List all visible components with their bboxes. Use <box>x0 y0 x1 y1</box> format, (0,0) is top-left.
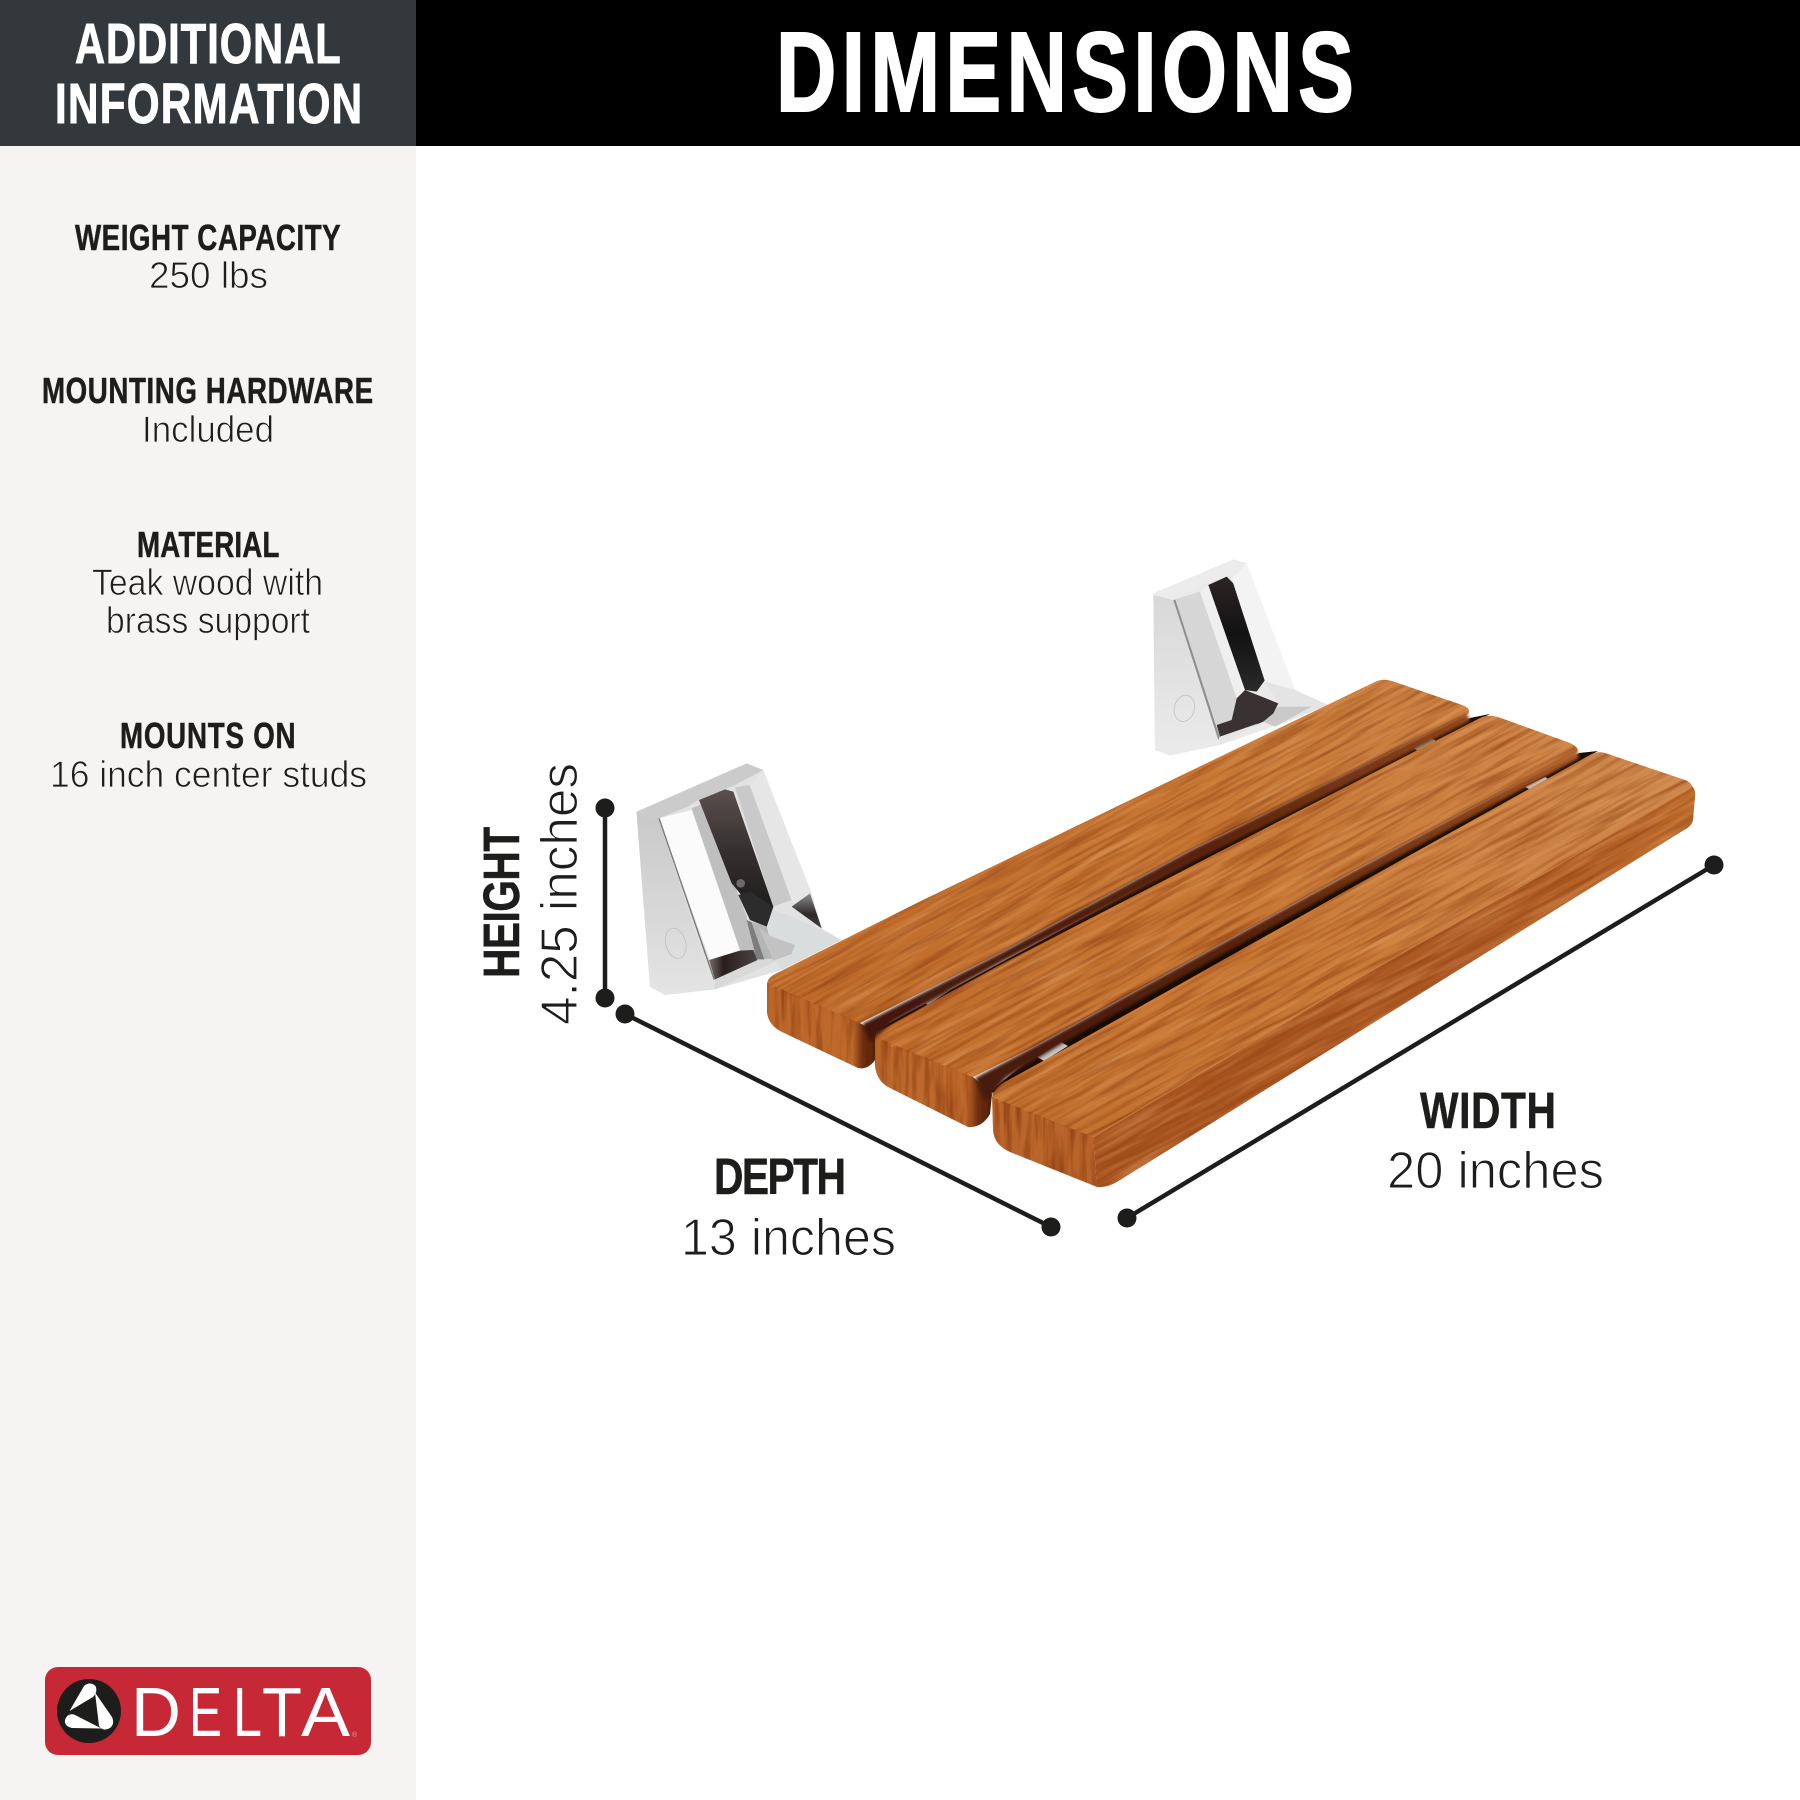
spec: mounting hardware: Included <box>142 409 274 450</box>
label: width: WIDTH <box>1420 1082 1556 1139</box>
slat: front <box>992 752 1692 1187</box>
dimension: depth line <box>616 1004 1060 1236</box>
gap: shadows and hinges <box>876 714 1598 1095</box>
slat side shadows <box>862 713 1579 1102</box>
header: additional information: ADDITIONAL <box>75 12 341 76</box>
header: dimensions <box>416 0 1800 146</box>
header: dimensions: DIMENSIONS <box>776 10 1354 136</box>
wood grain: long <box>768 680 1696 1188</box>
dimension: height line <box>596 798 614 1008</box>
spec: material: Teak wood with <box>92 562 323 603</box>
spec: mounting hardware: MOUNTING HARDWARE <box>42 371 373 411</box>
logo: delta: ® <box>352 1731 358 1739</box>
bracket: left <box>637 763 842 995</box>
wood grain: ends <box>767 983 1097 1187</box>
wordmark: D <box>131 1673 181 1751</box>
wordmark: A <box>301 1673 350 1751</box>
header: additional information: INFORMATION <box>55 72 362 136</box>
spec: material <box>92 525 323 641</box>
wordmark: T <box>262 1673 302 1751</box>
label: height <box>473 763 589 1025</box>
label: depth: DEPTH <box>714 1148 846 1205</box>
dimension: width line <box>1118 856 1724 1228</box>
slat: middle <box>875 716 1578 1127</box>
wordmark <box>131 1673 350 1751</box>
header: additional information <box>0 0 416 146</box>
seat: wood slats <box>767 680 1696 1188</box>
wordmark: L <box>233 1673 262 1751</box>
panel: sidebar <box>0 146 416 1800</box>
label: height: 4.25 inches <box>531 763 589 1025</box>
label: width: 20 inches <box>1387 1142 1604 1200</box>
spec: mounts on <box>50 716 367 795</box>
bracket: right <box>1153 559 1328 756</box>
spec: mounts on: MOUNTS ON <box>120 716 296 756</box>
spec: weight capacity <box>75 218 341 296</box>
icon: delta emblem <box>57 1679 121 1743</box>
slat 3 ridge highlight <box>1093 788 1690 1137</box>
label: width <box>1387 1082 1604 1200</box>
slat: back <box>767 680 1469 1068</box>
spec: material: brass support <box>106 600 311 641</box>
spec: weight capacity: 250 lbs <box>149 255 268 296</box>
label: depth <box>681 1148 896 1267</box>
logo: delta <box>45 1667 371 1755</box>
label: height: HEIGHT <box>473 827 530 978</box>
spec: mounts on: 16 inch center studs <box>50 754 367 795</box>
spec: mounting hardware <box>42 371 373 450</box>
spec: material: MATERIAL <box>137 525 279 565</box>
label: depth: 13 inches <box>681 1209 896 1267</box>
wordmark: E <box>189 1673 222 1751</box>
slat: front face <box>1093 786 1695 1187</box>
spec: weight capacity: WEIGHT CAPACITY <box>75 218 341 258</box>
